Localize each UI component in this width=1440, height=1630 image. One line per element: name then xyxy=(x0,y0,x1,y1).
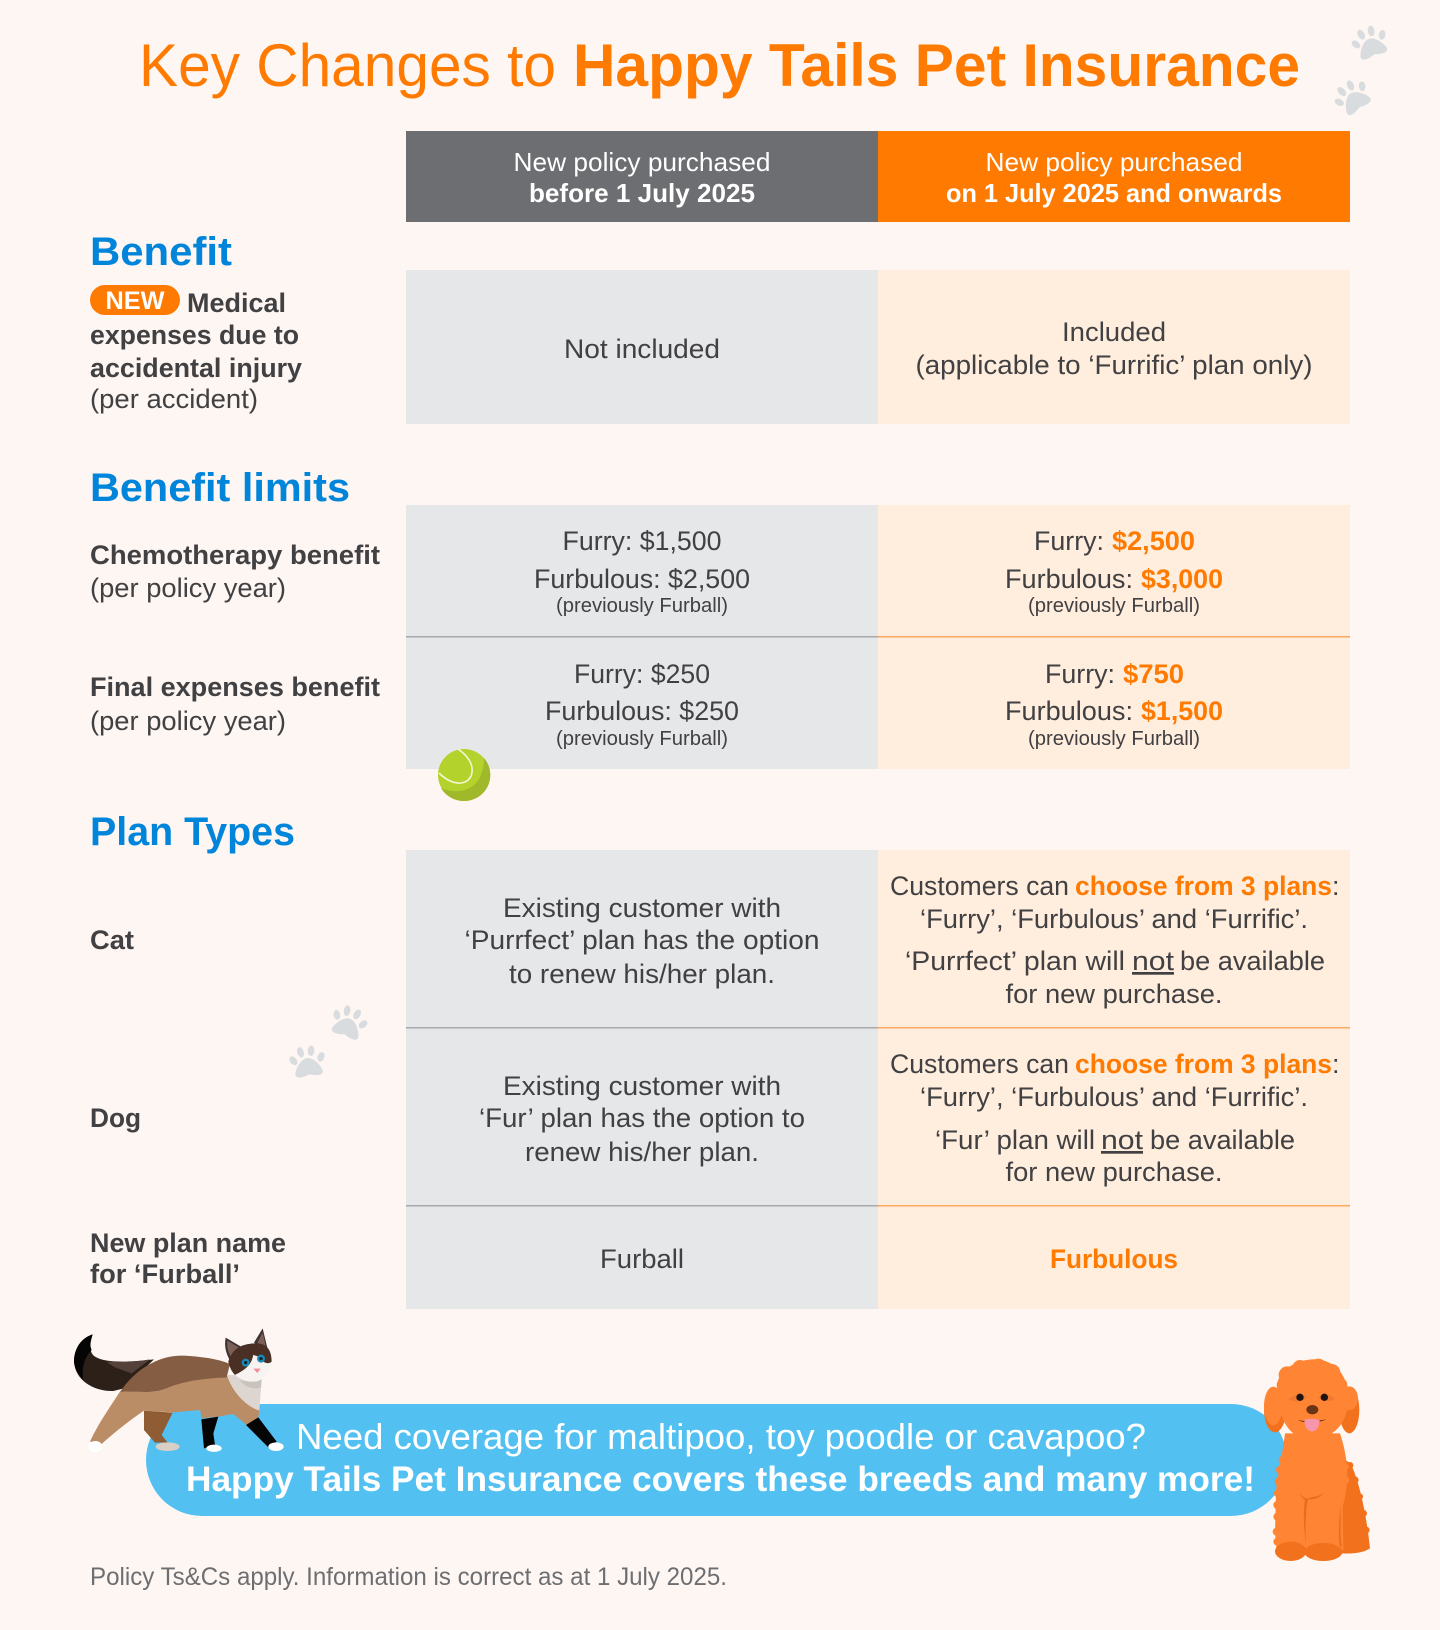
cell: chemotherapy before: (previously Furball) xyxy=(556,595,728,617)
cell: final expenses after: Furry: xyxy=(1045,659,1115,689)
row label: medical expenses: expenses due to xyxy=(90,320,299,350)
cell: cat after: choose from 3 plans xyxy=(1075,871,1332,901)
cell: cat after: Customers can xyxy=(890,871,1069,901)
cell: Furbulous: Furbulous xyxy=(1050,1244,1178,1274)
cell: dog after: not xyxy=(1101,1125,1144,1155)
cell: cat after xyxy=(890,871,1340,1009)
cell: dog before: ‘Fur’ plan has the option to xyxy=(479,1103,805,1133)
row label: final expenses benefit xyxy=(90,672,380,736)
cell: chemotherapy before xyxy=(534,526,750,617)
cell: final expenses after: (previously Furball) xyxy=(1028,728,1200,750)
cell: dog before: Existing customer with xyxy=(503,1071,781,1101)
table backgrounds xyxy=(406,270,1350,1309)
cell: chemotherapy before: Furry: $1,500 xyxy=(562,526,722,556)
cell: dog after: : xyxy=(1332,1049,1340,1079)
cell: not included: Not included xyxy=(564,334,720,364)
cell: cat before: ‘Purrfect’ plan has the option xyxy=(464,925,820,955)
cell: cat before: to renew his/her plan. xyxy=(509,959,775,989)
table header: on 1 July 2025 and onwards: New policy purchased xyxy=(986,147,1242,177)
cell: final expenses before: (previously Furball) xyxy=(556,728,728,750)
cell: included: (applicable to ‘Furrific’ plan only) xyxy=(916,350,1312,380)
cell: dog before xyxy=(479,1071,805,1167)
icon: paw prints middle left xyxy=(286,1001,373,1079)
title xyxy=(139,32,1300,99)
row label: final expenses benefit: (per policy year) xyxy=(90,706,286,736)
heading: Plan Types: Plan Types xyxy=(90,810,295,854)
cell: chemotherapy after: $2,500 xyxy=(1112,526,1195,556)
callout banner xyxy=(146,1404,1287,1516)
cell: dog after: ‘Furry’, ‘Furbulous’ and ‘Furrific’. xyxy=(920,1082,1308,1112)
badge: NEW xyxy=(90,285,180,315)
cell: cat after: not xyxy=(1132,946,1175,976)
icon: cat xyxy=(74,1328,284,1452)
callout banner: Happy Tails Pet Insurance covers these breeds and many more! xyxy=(186,1460,1255,1499)
icon: paw prints top right xyxy=(1327,21,1393,120)
title: Key Changes to xyxy=(139,32,556,99)
row label: final expenses benefit: Final expenses benefit xyxy=(90,672,380,702)
cell: chemotherapy after: $3,000 xyxy=(1141,564,1223,594)
cell: chemotherapy after: (previously Furball) xyxy=(1028,595,1200,617)
cell: cat after: : xyxy=(1332,871,1340,901)
cell: cat before xyxy=(464,893,820,989)
row label: medical expenses xyxy=(90,285,302,414)
cell: dog after: be available xyxy=(1150,1125,1295,1155)
cell: final expenses after: $750 xyxy=(1123,659,1184,689)
cell: cat after: ‘Purrfect’ plan will xyxy=(905,946,1125,976)
cell: dog after: choose from 3 plans xyxy=(1075,1049,1332,1079)
icon: tennis ball xyxy=(438,749,490,801)
row label: medical expenses: accidental injury xyxy=(90,353,302,383)
cell: cat after: for new purchase. xyxy=(1006,979,1222,1009)
cell: chemotherapy before: Furbulous: $2,500 xyxy=(534,564,750,594)
table header: on 1 July 2025 and onwards: on 1 July 2025 and onwards xyxy=(946,178,1282,208)
heading: Benefit limits: Benefit limits xyxy=(90,466,350,510)
cell: included xyxy=(916,317,1312,380)
cell: cat before: Existing customer with xyxy=(503,893,781,923)
cell: final expenses before xyxy=(545,659,739,750)
row label: chemotherapy benefit: Chemotherapy benefit xyxy=(90,540,380,570)
cell: final expenses before: Furbulous: $250 xyxy=(545,696,739,726)
row label: chemotherapy benefit: (per policy year) xyxy=(90,573,286,603)
cell: cat after: be available xyxy=(1180,946,1325,976)
row label: chemotherapy benefit xyxy=(90,540,380,603)
cell: dog after: ‘Fur’ plan will xyxy=(935,1125,1095,1155)
cell: dog after xyxy=(890,1049,1340,1187)
cell: chemotherapy after: Furry: xyxy=(1034,526,1104,556)
cell: final expenses after xyxy=(1005,659,1223,750)
callout banner: Need coverage for maltipoo, toy poodle or cavapoo? xyxy=(296,1416,1146,1457)
cell: chemotherapy after: Furbulous: xyxy=(1005,564,1133,594)
cell: dog after: for new purchase. xyxy=(1006,1157,1222,1187)
row label: Dog: Dog xyxy=(90,1103,141,1133)
heading: Benefit: Benefit xyxy=(90,230,232,274)
row label: new plan name xyxy=(90,1228,286,1289)
row label: medical expenses: Medical xyxy=(187,288,286,318)
row label: new plan name: for ‘Furball’ xyxy=(90,1259,240,1289)
cell: dog before: renew his/her plan. xyxy=(525,1137,759,1167)
cell: final expenses before: Furry: $250 xyxy=(574,659,710,689)
table header: on 1 July 2025 and onwards xyxy=(878,131,1350,222)
cell: final expenses after: Furbulous: xyxy=(1005,696,1133,726)
cell: Furball: Furball xyxy=(600,1244,684,1274)
cell: dog after: Customers can xyxy=(890,1049,1069,1079)
title: Happy Tails Pet Insurance xyxy=(573,32,1300,99)
cell: included: Included xyxy=(1062,317,1166,347)
badge: NEW: NEW xyxy=(106,287,165,315)
cell: cat after: ‘Furry’, ‘Furbulous’ and ‘Furrific’. xyxy=(920,904,1308,934)
row label: Cat: Cat xyxy=(90,925,134,955)
row label: new plan name: New plan name xyxy=(90,1228,286,1258)
table header: before 1 July 2025: New policy purchased xyxy=(514,147,770,177)
table header: before 1 July 2025 xyxy=(406,131,878,222)
cell: final expenses after: $1,500 xyxy=(1141,696,1223,726)
footnote: Policy Ts&Cs apply. Information is correct as at 1 July 2025. xyxy=(90,1563,727,1591)
icon: dog xyxy=(1264,1359,1370,1561)
cell: chemotherapy after xyxy=(1005,526,1223,617)
table header: before 1 July 2025: before 1 July 2025 xyxy=(529,178,755,208)
row label: medical expenses: (per accident) xyxy=(90,384,258,414)
